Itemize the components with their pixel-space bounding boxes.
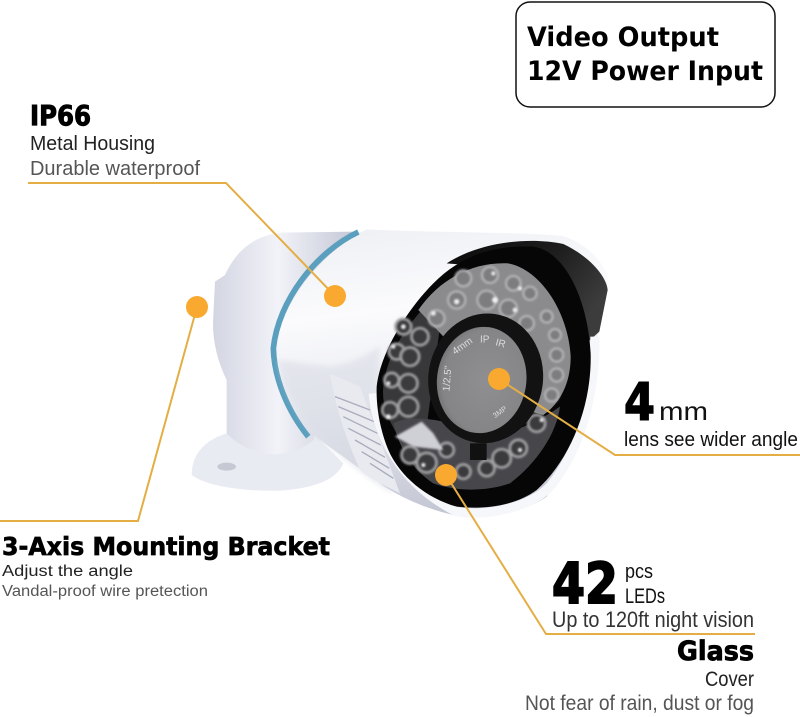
text block: glass cover: Glass bbox=[677, 636, 754, 667]
text block: mounting bracket: Vandal-proof wire pretection bbox=[2, 583, 208, 600]
callout box: video and power bbox=[516, 2, 775, 107]
lens mount tab bbox=[470, 443, 487, 460]
text block: 4 mm lens: 4 bbox=[624, 373, 655, 433]
text block: IP66: IP66 bbox=[30, 100, 91, 132]
board LEDs bbox=[429, 267, 563, 402]
text block: IP66: Durable waterproof bbox=[30, 158, 200, 180]
text block: IP66 bbox=[30, 100, 200, 180]
text block: glass cover bbox=[525, 636, 754, 715]
bracket arm bbox=[213, 232, 357, 454]
text block: 42 pcs LEDs: pcs bbox=[625, 561, 653, 583]
lens markings: IP bbox=[480, 335, 490, 346]
LED highlights bbox=[386, 271, 544, 467]
front white rim bbox=[373, 337, 595, 513]
marker: bracket bbox=[186, 296, 208, 318]
lens face bbox=[430, 321, 533, 439]
lower LED tray bbox=[393, 407, 560, 490]
LED board bbox=[418, 263, 571, 415]
marker: lens bbox=[488, 368, 510, 390]
text block: 42 pcs LEDs bbox=[552, 552, 754, 632]
lens markings bbox=[441, 335, 509, 420]
leader line: bracket bbox=[0, 307, 197, 521]
text block: 4 mm lens bbox=[624, 373, 798, 451]
left LED tray bbox=[383, 307, 440, 433]
lens markings: 3MP bbox=[491, 404, 509, 420]
text block: 42 pcs LEDs: Up to 120ft night vision bbox=[552, 607, 754, 632]
marker: housing bbox=[324, 285, 346, 307]
text block: 4 mm lens: mm bbox=[659, 396, 708, 426]
leader line: LEDs bbox=[446, 475, 755, 634]
marker: LEDs bbox=[435, 464, 457, 486]
lens markings: 4mm bbox=[450, 336, 475, 357]
callout box: video and power: Video Output bbox=[527, 22, 719, 53]
ribs bbox=[330, 373, 400, 493]
mounting hole bbox=[217, 463, 236, 471]
blue ring bbox=[273, 232, 358, 437]
lens markings: IR bbox=[494, 337, 507, 350]
housing bbox=[277, 229, 608, 517]
lens outer ring bbox=[420, 306, 551, 451]
lens markings: 1/2.5" bbox=[441, 365, 455, 392]
text block: mounting bracket: 3-Axis Mounting Bracket bbox=[2, 532, 330, 561]
dark opening bbox=[377, 246, 591, 508]
shaded lower housing bbox=[279, 347, 393, 493]
text block: glass cover: Not fear of rain, dust or fog bbox=[525, 692, 754, 715]
callout box: video and power: 12V Power Input bbox=[527, 56, 763, 87]
text block: glass cover: Cover bbox=[705, 668, 754, 691]
bracket base bbox=[192, 433, 343, 491]
leader line: IP66 bbox=[28, 183, 335, 296]
dark IR LEDs bbox=[382, 319, 545, 479]
text block: 42 pcs LEDs: 42 bbox=[552, 552, 618, 617]
text block: mounting bracket: Adjust the angle bbox=[2, 563, 133, 580]
text block: 42 pcs LEDs: LEDs bbox=[625, 585, 665, 608]
white insulation bbox=[395, 422, 443, 450]
hood interior bbox=[447, 241, 608, 342]
text block: mounting bracket bbox=[2, 532, 330, 600]
camera photo bbox=[192, 229, 608, 517]
text block: IP66: Metal Housing bbox=[30, 133, 155, 155]
leader line: lens bbox=[499, 379, 800, 455]
